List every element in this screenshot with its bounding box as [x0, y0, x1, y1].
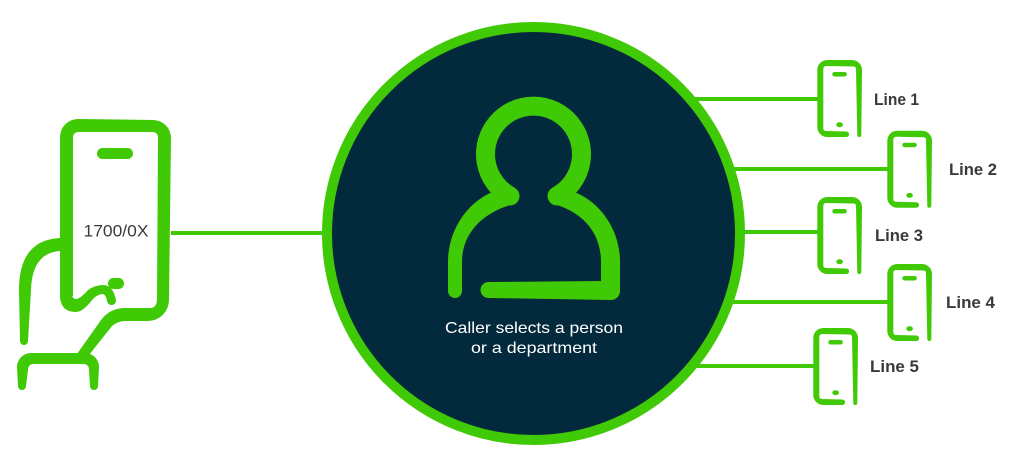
phone home button [108, 278, 124, 289]
icon: phone line 3 [817, 197, 862, 274]
arm [19, 238, 60, 345]
circle caption: Caller selects a person [445, 320, 623, 337]
label: line 3: Line 3 [875, 227, 923, 245]
phone number: 1700/0X [84, 222, 148, 240]
hand edge [77, 308, 125, 355]
label: line 5: Line 5 [870, 358, 919, 376]
icon: phone line 1 [817, 60, 862, 137]
icon: phone line 2 [887, 131, 932, 208]
icon: hand holding phone [17, 119, 171, 390]
label: line 4: Line 4 [946, 294, 996, 312]
circle caption [445, 320, 623, 357]
icon: person [448, 106, 620, 300]
phone body [60, 119, 171, 321]
cuff [17, 353, 99, 390]
thumb [60, 285, 116, 312]
circle caption: or a department [471, 340, 598, 357]
central circle [327, 27, 740, 440]
label: line 1: Line 1 [874, 91, 919, 109]
label: line 2: Line 2 [949, 161, 997, 179]
phone speaker [97, 148, 133, 159]
icon: phone line 4 [887, 264, 932, 341]
connector lines [171, 97, 890, 368]
icon: phone line 5 [813, 328, 858, 405]
